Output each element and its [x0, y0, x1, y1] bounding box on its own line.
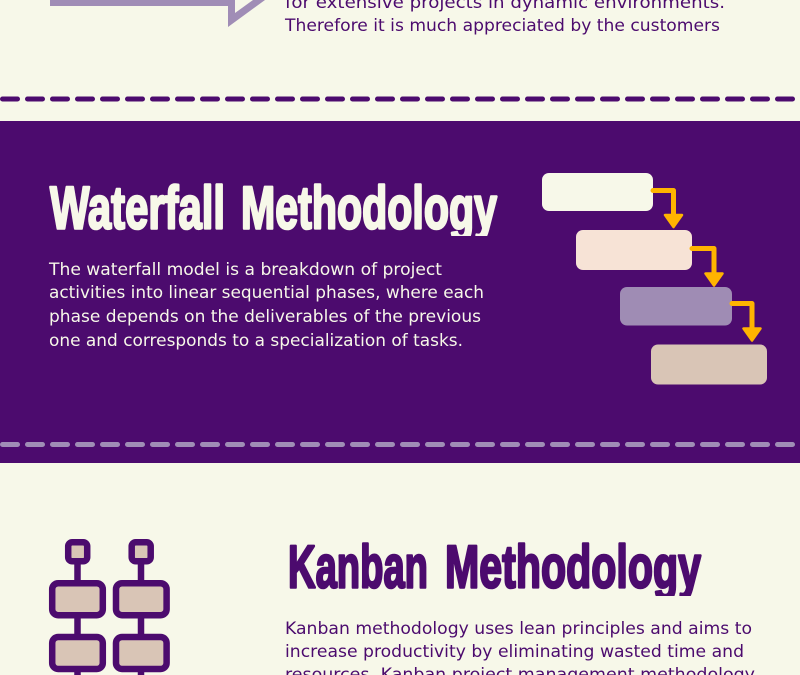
heading: waterfall methodology: Waterfall: [50, 174, 225, 242]
text: agile description: [284, 0, 725, 35]
text: waterfall description: activities into linear sequential phases, where each: [49, 283, 484, 302]
text: kanban description: Kanban methodology uses lean principles and aims to: [285, 619, 752, 638]
heading: kanban methodology: Kanban: [288, 532, 428, 600]
arrow: phase 1 to 2: [653, 190, 682, 227]
heading: kanban methodology: [290, 542, 702, 596]
text: waterfall description: phase depends on the deliverables of the previous: [49, 307, 481, 326]
text: waterfall description: [48, 260, 484, 350]
arrow: phase 2 to 3: [692, 248, 722, 286]
text: waterfall description: one and corresponds to a specialization of tasks.: [49, 331, 463, 350]
heading: waterfall methodology: [49, 183, 498, 236]
text: agile description: Therefore it is much appreciated by the customers: [284, 16, 720, 35]
arrow: phase 3 to 4: [732, 304, 760, 340]
text: waterfall description: The waterfall model is a breakdown of project: [48, 260, 443, 279]
chart: waterfall phases: [542, 173, 767, 384]
icon: speech bubble: [50, 0, 265, 27]
text: kanban description: increase productivity by eliminating wasted time and: [285, 642, 744, 661]
heading: waterfall methodology: Methodology: [241, 174, 497, 242]
panel: kanban section: [48, 539, 754, 675]
icon: kanban board: [52, 542, 167, 675]
text: kanban description: [285, 619, 755, 675]
panel: waterfall section: [0, 121, 800, 463]
panel: agile section top: [0, 0, 800, 121]
